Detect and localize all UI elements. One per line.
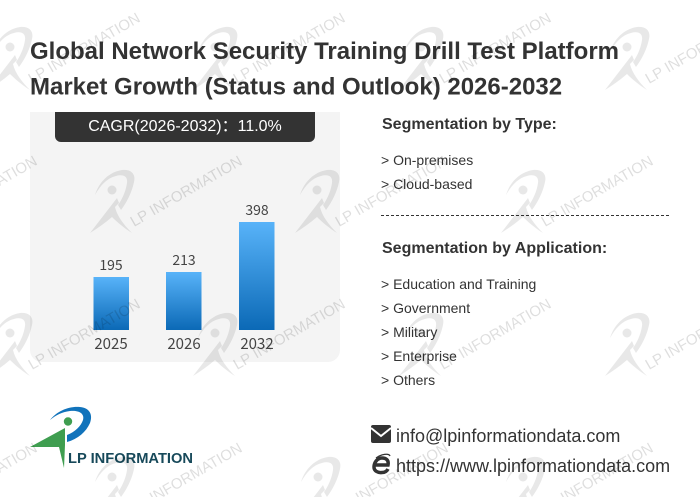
segmentation by application bbox=[381, 240, 607, 388]
bar 2025: 195 bbox=[99, 255, 123, 275]
bar 2025 bbox=[94, 255, 129, 354]
segmentation by application: > Government bbox=[381, 300, 470, 316]
icon: email bbox=[371, 425, 391, 443]
chart panel background bbox=[30, 112, 340, 362]
bar 2026: 213 bbox=[172, 250, 196, 270]
logo: LP Information bbox=[30, 407, 193, 468]
segmentation by type: Segmentation by Type: bbox=[382, 116, 557, 133]
bar 2032 bbox=[239, 200, 274, 354]
CAGR badge: CAGR(2026-2032)：11.0% bbox=[88, 118, 282, 135]
bar 2032: 398 bbox=[245, 200, 269, 220]
CAGR badge bbox=[55, 112, 315, 142]
segmentation by application: Segmentation by Application: bbox=[382, 240, 607, 257]
segmentation by application: > Military bbox=[381, 324, 437, 340]
bar 2032: 2032 bbox=[240, 333, 274, 354]
email address: info@lpinformationdata.com bbox=[396, 426, 620, 446]
bar 2026: 2026 bbox=[167, 333, 201, 354]
title: Global Network Security Training Drill Test Platform bbox=[30, 38, 619, 65]
bar 2026 bbox=[166, 250, 202, 354]
segmentation by application: > Enterprise bbox=[381, 348, 457, 364]
title: Market Growth (Status and Outlook) 2026-2032 bbox=[30, 74, 562, 100]
segmentation by application: > Education and Training bbox=[381, 276, 536, 292]
segmentation by application: > Others bbox=[381, 372, 435, 388]
icon: web browser bbox=[374, 454, 390, 473]
bar 2025: 2025 bbox=[94, 333, 128, 354]
segmentation by type: > On-premises bbox=[381, 152, 473, 168]
logo: LP Information: LP INFORMATION bbox=[68, 451, 193, 467]
segmentation by type bbox=[381, 116, 557, 192]
bar chart bbox=[94, 200, 274, 354]
title bbox=[30, 38, 619, 100]
website address: https://www.lpinformationdata.com bbox=[396, 456, 670, 476]
segmentation by type: > Cloud-based bbox=[381, 176, 472, 192]
